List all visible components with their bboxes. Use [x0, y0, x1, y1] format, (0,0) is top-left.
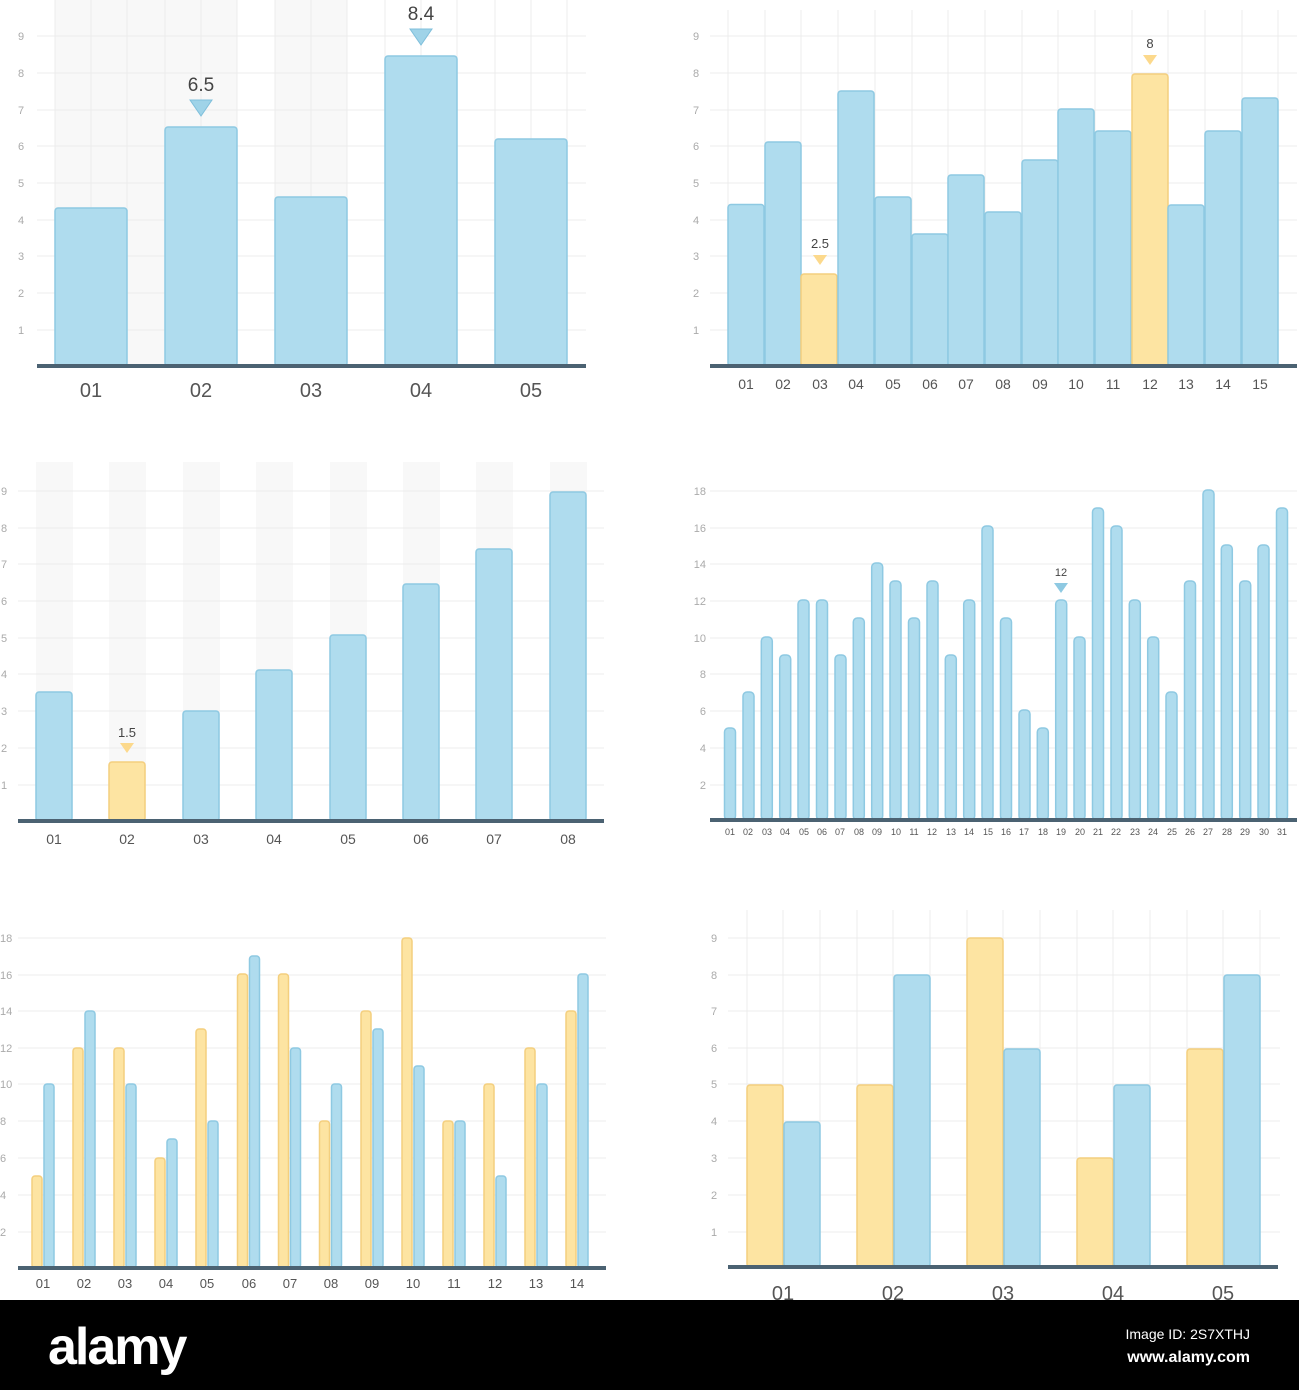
chart 3: eight ascending bars: 6: [1, 596, 7, 608]
chart 6: five paired wide bars: 3: [711, 1153, 717, 1165]
chart 4: thirty-one thin bars: 06: [817, 827, 827, 837]
chart 4: thirty-one thin bars: 23: [1130, 827, 1140, 837]
chart 4: thirty-one thin bars: 19: [1056, 827, 1066, 837]
chart 1: five blue bars: 04: [410, 380, 432, 402]
chart 4: thirty-one thin bars: 12: [694, 596, 706, 608]
chart 1: five blue bars: 03: [300, 380, 322, 402]
chart 5: fourteen paired thin bars: 04: [159, 1276, 173, 1291]
chart 4: thirty-one thin bars: 03: [762, 827, 772, 837]
chart 1: five blue bars: 8.4: [408, 4, 435, 25]
chart 3: eight ascending bars: 02: [119, 831, 135, 847]
chart 4: thirty-one thin bars: 08: [854, 827, 864, 837]
chart 2: fifteen bars with two highlighted: 5: [693, 178, 699, 190]
chart 1: five blue bars: 2: [18, 288, 24, 300]
chart 1: five blue bars: 9: [18, 31, 24, 43]
chart 6: five paired wide bars: 02: [882, 1283, 904, 1305]
chart 3: eight ascending bars: 01: [46, 831, 62, 847]
chart 4: thirty-one thin bars: 12: [1055, 567, 1067, 579]
chart 2: fifteen bars with two highlighted: 12: [1142, 376, 1158, 392]
chart 1: five blue bars: 6.5: [188, 75, 214, 96]
chart 1: five blue bars: [18, 0, 586, 402]
chart 5: fourteen paired thin bars: 6: [0, 1153, 6, 1165]
chart 2: fifteen bars with two highlighted: 05: [885, 376, 901, 392]
chart 5: fourteen paired thin bars: 11: [447, 1276, 461, 1291]
chart 6: five paired wide bars: 8: [711, 970, 717, 982]
chart 2: fifteen bars with two highlighted: 6: [693, 141, 699, 153]
footer: watermark bar: [0, 1300, 1299, 1390]
chart 4: thirty-one thin bars: 05: [799, 827, 809, 837]
chart 1: five blue bars: 6: [18, 141, 24, 153]
chart 2: fifteen bars with two highlighted: 2: [693, 288, 699, 300]
chart 4: thirty-one thin bars: 16: [1001, 827, 1011, 837]
chart 3: eight ascending bars: 07: [486, 831, 502, 847]
chart 2: fifteen bars with two highlighted: 01: [738, 376, 754, 392]
chart 5: fourteen paired thin bars: 10: [0, 1079, 12, 1091]
chart 4: thirty-one thin bars: 18: [694, 486, 706, 498]
chart 5: fourteen paired thin bars: [0, 933, 606, 1291]
chart 2: fifteen bars with two highlighted: 03: [812, 376, 828, 392]
chart 6: five paired wide bars: 9: [711, 933, 717, 945]
chart 4: thirty-one thin bars: 18: [1038, 827, 1048, 837]
chart 2: fifteen bars with two highlighted: 06: [922, 376, 938, 392]
footer: watermark bar: alamy: [48, 1318, 188, 1376]
chart 4: thirty-one thin bars: 30: [1259, 827, 1269, 837]
chart 4: thirty-one thin bars: 17: [1019, 827, 1029, 837]
chart 4: thirty-one thin bars: 04: [780, 827, 790, 837]
chart 3: eight ascending bars: 1.5: [118, 725, 136, 740]
chart 4: thirty-one thin bars: 6: [700, 706, 706, 718]
chart 1: five blue bars: 8: [18, 68, 24, 80]
chart 3: eight ascending bars: 04: [266, 831, 282, 847]
chart 1: five blue bars: 05: [520, 380, 542, 402]
chart 4: thirty-one thin bars: 15: [983, 827, 993, 837]
chart 4: thirty-one thin bars: 07: [835, 827, 845, 837]
chart 5: fourteen paired thin bars: 09: [365, 1276, 379, 1291]
chart 4: thirty-one thin bars: 22: [1111, 827, 1121, 837]
chart 3: eight ascending bars: 4: [1, 669, 7, 681]
chart 4: thirty-one thin bars: 28: [1222, 827, 1232, 837]
chart 4: thirty-one thin bars: 4: [700, 743, 706, 755]
chart 4: thirty-one thin bars: 2: [700, 780, 706, 792]
chart 4: thirty-one thin bars: 14: [694, 559, 706, 571]
chart 4: thirty-one thin bars: 20: [1075, 827, 1085, 837]
chart 2: fifteen bars with two highlighted: 9: [693, 31, 699, 43]
chart 2: fifteen bars with two highlighted: 8: [1146, 36, 1154, 51]
chart 2: fifteen bars with two highlighted: 15: [1252, 376, 1268, 392]
chart 4: thirty-one thin bars: 12: [927, 827, 937, 837]
footer: watermark bar: Image ID: 2S7XTHJ: [1126, 1326, 1250, 1342]
chart 5: fourteen paired thin bars: 10: [406, 1276, 420, 1291]
chart 3: eight ascending bars: 05: [340, 831, 356, 847]
chart 6: five paired wide bars: 4: [711, 1116, 717, 1128]
chart 5: fourteen paired thin bars: 16: [0, 970, 12, 982]
chart 4: thirty-one thin bars: 26: [1185, 827, 1195, 837]
chart 5: fourteen paired thin bars: 03: [118, 1276, 132, 1291]
chart 5: fourteen paired thin bars: 02: [77, 1276, 91, 1291]
chart 1: five blue bars: 5: [18, 178, 24, 190]
chart 4: thirty-one thin bars: 01: [725, 827, 735, 837]
chart 4: thirty-one thin bars: 24: [1148, 827, 1158, 837]
chart 2: fifteen bars with two highlighted: 02: [775, 376, 791, 392]
chart 5: fourteen paired thin bars: 12: [0, 1043, 12, 1055]
chart 5: fourteen paired thin bars: 4: [0, 1190, 6, 1202]
chart 4: thirty-one thin bars: 10: [694, 633, 706, 645]
chart 4: thirty-one thin bars: 29: [1240, 827, 1250, 837]
chart 6: five paired wide bars: 05: [1212, 1283, 1234, 1305]
chart 2: fifteen bars with two highlighted: 4: [693, 215, 699, 227]
chart 6: five paired wide bars: 04: [1102, 1283, 1124, 1305]
chart 4: thirty-one thin bars: 8: [700, 669, 706, 681]
chart 6: five paired wide bars: 03: [992, 1283, 1014, 1305]
chart 2: fifteen bars with two highlighted: 13: [1178, 376, 1194, 392]
chart 5: fourteen paired thin bars: 8: [0, 1116, 6, 1128]
chart 2: fifteen bars with two highlighted: 1: [693, 325, 699, 337]
chart 6: five paired wide bars: 2: [711, 1190, 717, 1202]
chart 4: thirty-one thin bars: 10: [891, 827, 901, 837]
chart 4: thirty-one thin bars: 25: [1167, 827, 1177, 837]
chart 3: eight ascending bars: 06: [413, 831, 429, 847]
chart 2: fifteen bars with two highlighted: 04: [848, 376, 864, 392]
chart 6: five paired wide bars: 7: [711, 1006, 717, 1018]
chart 6: five paired wide bars: 01: [772, 1283, 794, 1305]
chart 3: eight ascending bars: 1: [1, 780, 7, 792]
chart 2: fifteen bars with two highlighted: [693, 10, 1297, 392]
chart 5: fourteen paired thin bars: 18: [0, 933, 12, 945]
chart 5: fourteen paired thin bars: 14: [570, 1276, 584, 1291]
chart 2: fifteen bars with two highlighted: 8: [693, 68, 699, 80]
chart 3: eight ascending bars: 3: [1, 706, 7, 718]
chart 3: eight ascending bars: [1, 462, 604, 847]
chart 1: five blue bars: 1: [18, 325, 24, 337]
chart 6: five paired wide bars: 6: [711, 1043, 717, 1055]
chart 5: fourteen paired thin bars: 13: [529, 1276, 543, 1291]
chart 3: eight ascending bars: 8: [1, 523, 7, 535]
chart 3: eight ascending bars: 7: [1, 559, 7, 571]
chart 4: thirty-one thin bars: 27: [1203, 827, 1213, 837]
chart 4: thirty-one thin bars: 14: [964, 827, 974, 837]
chart 4: thirty-one thin bars: 11: [909, 827, 919, 837]
chart 5: fourteen paired thin bars: 05: [200, 1276, 214, 1291]
chart 2: fifteen bars with two highlighted: 3: [693, 251, 699, 263]
chart 2: fifteen bars with two highlighted: 08: [995, 376, 1011, 392]
chart 5: fourteen paired thin bars: 08: [324, 1276, 338, 1291]
chart 6: five paired wide bars: 5: [711, 1079, 717, 1091]
chart 3: eight ascending bars: 2: [1, 743, 7, 755]
chart 3: eight ascending bars: 08: [560, 831, 576, 847]
chart 2: fifteen bars with two highlighted: 09: [1032, 376, 1048, 392]
chart 5: fourteen paired thin bars: 12: [488, 1276, 502, 1291]
chart 6: five paired wide bars: 1: [711, 1227, 717, 1239]
chart 2: fifteen bars with two highlighted: 7: [693, 105, 699, 117]
chart 4: thirty-one thin bars: 16: [694, 523, 706, 535]
chart 3: eight ascending bars: 03: [193, 831, 209, 847]
chart 2: fifteen bars with two highlighted: 14: [1215, 376, 1231, 392]
chart 1: five blue bars: 7: [18, 105, 24, 117]
chart 3: eight ascending bars: 9: [1, 486, 7, 498]
chart 5: fourteen paired thin bars: 14: [0, 1006, 12, 1018]
chart 2: fifteen bars with two highlighted: 2.5: [811, 236, 829, 251]
chart 4: thirty-one thin bars: 13: [946, 827, 956, 837]
chart 2: fifteen bars with two highlighted: 07: [958, 376, 974, 392]
chart 4: thirty-one thin bars: [694, 486, 1297, 837]
chart 1: five blue bars: 3: [18, 251, 24, 263]
chart 2: fifteen bars with two highlighted: 10: [1068, 376, 1084, 392]
chart 3: eight ascending bars: 5: [1, 633, 7, 645]
chart 6: five paired wide bars: [711, 910, 1280, 1305]
chart 1: five blue bars: 02: [190, 380, 212, 402]
chart 4: thirty-one thin bars: 02: [743, 827, 753, 837]
chart 4: thirty-one thin bars: 21: [1093, 827, 1103, 837]
chart 5: fourteen paired thin bars: 01: [36, 1276, 50, 1291]
chart 5: fourteen paired thin bars: 06: [242, 1276, 256, 1291]
chart 2: fifteen bars with two highlighted: 11: [1106, 376, 1120, 392]
chart 5: fourteen paired thin bars: 07: [283, 1276, 297, 1291]
chart 4: thirty-one thin bars: 09: [872, 827, 882, 837]
chart 5: fourteen paired thin bars: 2: [0, 1227, 6, 1239]
chart 1: five blue bars: 01: [80, 380, 102, 402]
footer: watermark bar: www.alamy.com: [1126, 1349, 1250, 1366]
chart 4: thirty-one thin bars: 31: [1277, 827, 1287, 837]
chart 1: five blue bars: 4: [18, 215, 24, 227]
